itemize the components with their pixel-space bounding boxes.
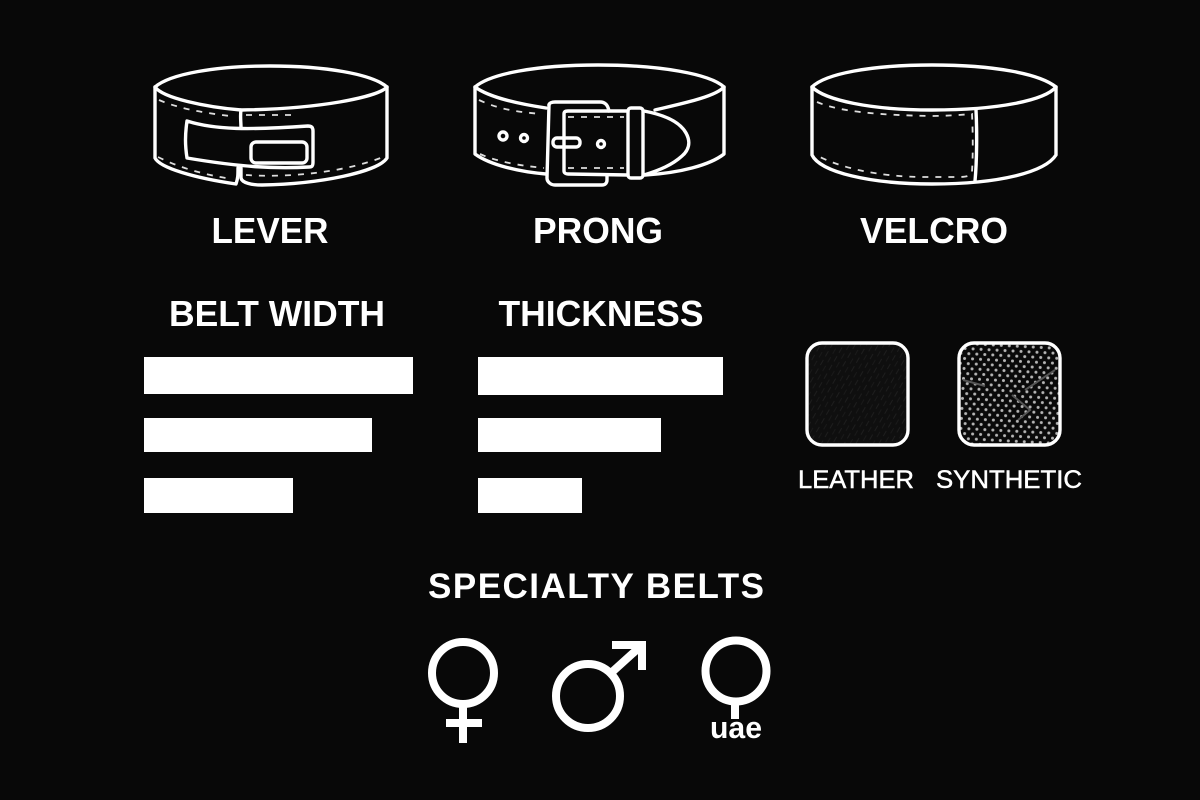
icon: specialty symbol bbox=[706, 640, 766, 745]
swatch: leather bbox=[807, 343, 908, 445]
label: prong: PRONG bbox=[533, 210, 663, 251]
heading: belt width: BELT WIDTH bbox=[169, 293, 385, 334]
label: leather: LEATHER bbox=[798, 466, 914, 494]
label: synthetic: SYNTHETIC bbox=[936, 466, 1082, 494]
swatch: synthetic bbox=[959, 343, 1060, 445]
bar chart: belt width bars bbox=[144, 357, 413, 513]
bar chart: thickness bars bbox=[478, 357, 723, 513]
panel: thickness bbox=[478, 293, 723, 513]
icon: specialty symbol: uae bbox=[710, 710, 762, 745]
icon: prong belt bbox=[475, 65, 724, 185]
heading: specialty belts: SPECIALTY BELTS bbox=[428, 567, 764, 606]
icon: male symbol bbox=[556, 645, 642, 728]
icon: lever belt bbox=[155, 66, 387, 185]
icon: velcro belt bbox=[812, 65, 1056, 184]
panel: belt width bbox=[144, 293, 413, 513]
label: lever: LEVER bbox=[212, 210, 328, 251]
icon: female symbol bbox=[432, 642, 494, 743]
heading: thickness: THICKNESS bbox=[498, 293, 704, 334]
label: velcro: VELCRO bbox=[860, 210, 1008, 251]
